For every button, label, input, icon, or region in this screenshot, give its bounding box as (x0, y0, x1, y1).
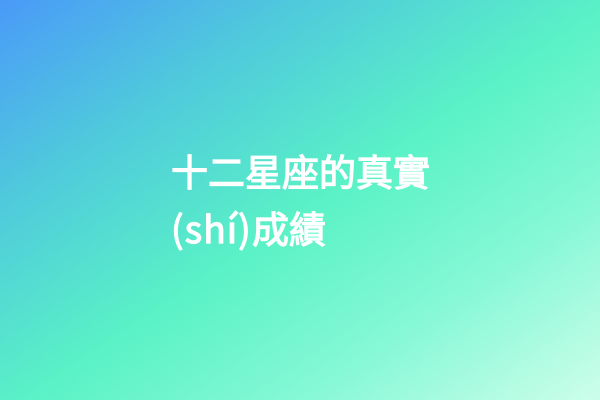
title: 十二星座的真實 (171, 143, 430, 197)
title (171, 143, 430, 254)
title: (shí)成績 (171, 200, 326, 254)
